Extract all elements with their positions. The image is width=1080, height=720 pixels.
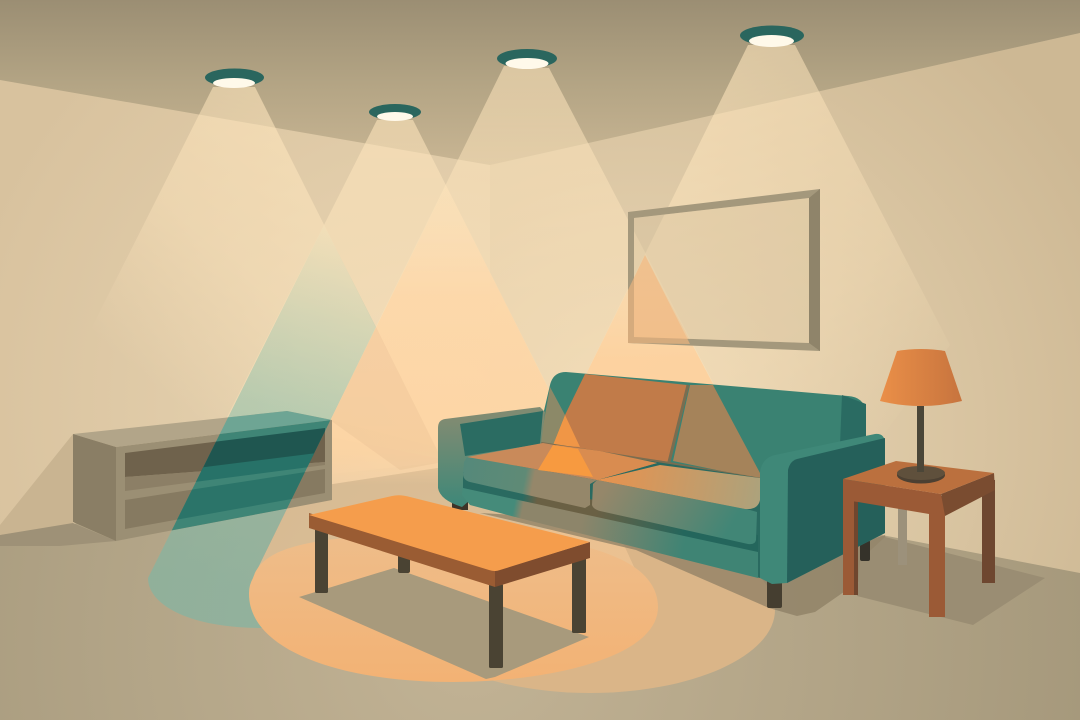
sofa right arm xyxy=(760,434,885,584)
light beam 2 xyxy=(227,120,600,490)
ceiling light 2 xyxy=(369,104,421,121)
ceiling light 4 xyxy=(740,26,804,47)
teal overlap beam xyxy=(148,225,376,628)
orange overlap beam left xyxy=(253,185,640,580)
ceiling light 3 xyxy=(497,49,557,69)
sofa seat left top xyxy=(467,443,657,480)
light beam 4 xyxy=(515,45,950,518)
cabinet wall shadow xyxy=(0,434,73,535)
cabinet teal light overlay xyxy=(172,411,330,530)
light beam 1 xyxy=(0,87,443,510)
sofa under-seat fill xyxy=(463,444,760,578)
cabinet floor shadow xyxy=(0,523,116,546)
sofa floor shadow xyxy=(480,513,890,616)
light pool: orange floor right xyxy=(405,527,775,693)
sofa seat left front xyxy=(463,457,597,508)
side table xyxy=(843,461,995,617)
room: floor xyxy=(0,460,1080,720)
side table floor shadow xyxy=(857,537,1045,625)
dull overlap of beam 1 inside orange xyxy=(330,327,443,470)
low cabinet xyxy=(73,411,332,541)
sofa back zones lit by beams xyxy=(540,387,565,445)
room: left wall xyxy=(0,80,490,535)
sofa seat right front xyxy=(592,480,757,544)
light beam 3 xyxy=(330,66,760,500)
frame orange light tint xyxy=(628,255,690,344)
sofa legs xyxy=(767,578,782,608)
light pool: orange floor left xyxy=(249,534,658,682)
sofa seat bright overlap xyxy=(538,445,593,477)
room: ceiling xyxy=(0,0,1080,165)
table lamp xyxy=(880,349,962,484)
room: right wall xyxy=(490,33,1080,573)
picture frame xyxy=(628,189,820,351)
sofa cushion dividers xyxy=(669,385,688,462)
sofa back xyxy=(538,372,866,482)
ceiling light 1 xyxy=(205,68,264,88)
sofa seat right top xyxy=(597,465,760,509)
sofa dark strip under seats xyxy=(463,472,758,552)
sofa left arm xyxy=(438,407,545,507)
sofa base xyxy=(462,484,758,578)
coffee table xyxy=(309,495,590,668)
sofa xyxy=(438,372,885,608)
orange overlap beam right xyxy=(515,255,760,518)
coffee table shadow xyxy=(299,568,589,679)
